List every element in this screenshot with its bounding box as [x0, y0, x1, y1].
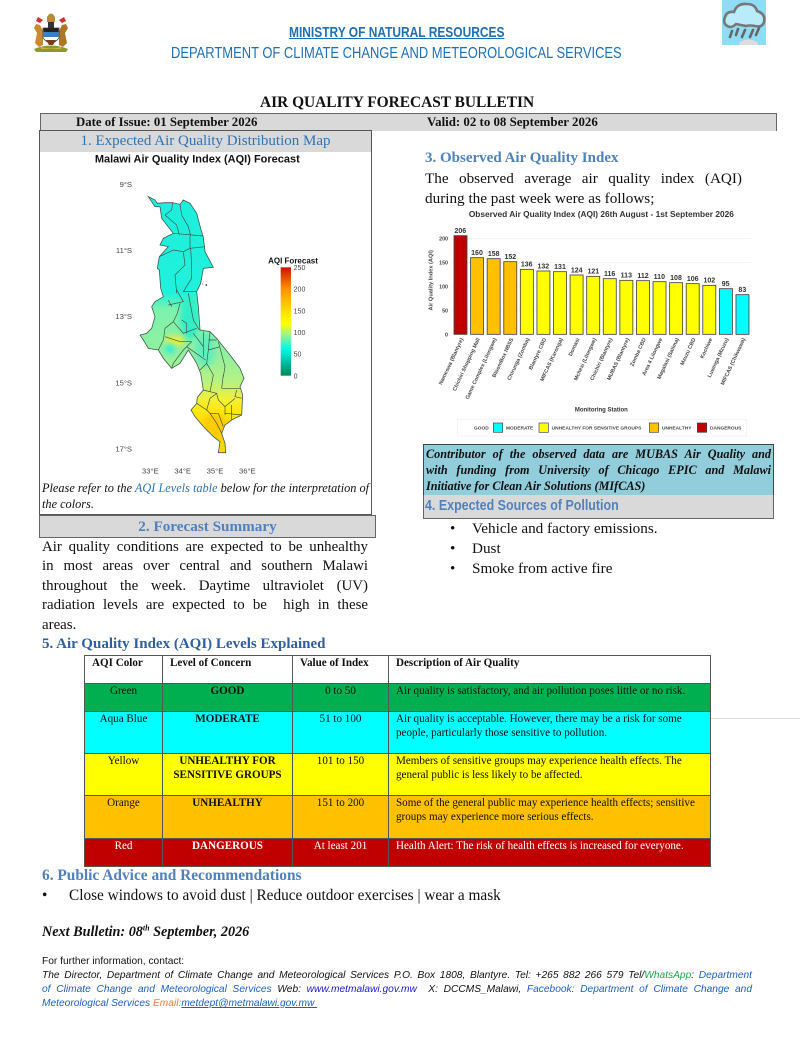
longitude labels: 33°E [142, 466, 159, 475]
contributor callout: with funding from University of Chicago EPIC and Malawi [426, 463, 771, 477]
contact information: Meteorological Services Email:metdept@metmalawi.gov.mw [42, 998, 314, 1009]
map note: the colors. [42, 497, 94, 511]
bar values: 106 [687, 276, 699, 283]
latitude labels: 9°S [120, 180, 132, 189]
station labels: Blantyre CBD [528, 337, 548, 371]
pollution sources list [450, 520, 658, 577]
colour scale [281, 267, 291, 376]
section 4 text: 4. Expected Sources of Pollution [425, 497, 619, 514]
AQI levels table: DANGEROUS [192, 840, 263, 852]
scale labels [294, 265, 305, 380]
y axis: 200 [439, 237, 448, 243]
AQI levels table: Some of the general public may experience health effects; sensitive groups may experience more serious effects. [396, 797, 695, 823]
latitude labels: 15°S [115, 378, 132, 387]
y axis: 50 [442, 309, 448, 315]
bar values: 132 [537, 263, 549, 270]
heading: section 1: 1. Expected Air Quality Distribution Map [81, 133, 330, 149]
bar values: 136 [521, 262, 533, 269]
longitude labels: 34°E [174, 466, 191, 475]
panel: map box [39, 130, 372, 515]
y axis: 150 [439, 261, 448, 267]
bar values: 95 [722, 281, 730, 288]
bar values [454, 228, 746, 294]
latitude labels: 13°S [115, 312, 132, 321]
scale labels: 50 [294, 352, 302, 359]
x axis title: Monitoring Station [575, 408, 628, 414]
AQI levels table: Aqua Blue [100, 713, 147, 725]
bar values: 131 [554, 264, 566, 271]
bar values: 113 [621, 273, 632, 280]
station labels: Chichiri (Blantyre) [590, 337, 615, 382]
legend title: AQI Forecast [268, 256, 318, 265]
contact information: The Director, Department of Climate Change and Meteorological Services P.O. Box 1808, Blantyre. Tel: +265 882 266 579 Tel/WhatsApp: Department [42, 970, 752, 981]
contributor callout: Contributor of the observed data are MUBAS Air Quality and [426, 447, 771, 461]
chart legend: GOOD [474, 425, 489, 431]
station labels: BloomBox NBSS [492, 337, 515, 379]
station labels: Domasi [568, 337, 582, 357]
map note: Please refer to the AQI Levels table below for the interpretation of [42, 481, 369, 495]
station labels [438, 337, 747, 400]
chart legend: DANGEROUS [710, 425, 742, 431]
station labels: MIFCAS (Chikwawa) [720, 337, 747, 386]
heading: section 4 [423, 495, 774, 519]
chart legend: UNHEALTHY [662, 425, 692, 431]
public advice: • [42, 887, 47, 904]
AQI levels table: Health Alert: The risk of health effects is increased for everyone. [396, 840, 684, 852]
scale labels: 100 [294, 330, 305, 337]
bar values: 110 [654, 274, 665, 281]
chart legend [457, 419, 747, 436]
AQI levels table: Air quality is acceptable. However, there may be a risk for some people, particularly those sensitive to pollution. [396, 713, 682, 739]
bar values: 116 [604, 271, 615, 278]
bar values: 160 [471, 250, 483, 257]
pollution sources list: Dust [472, 540, 501, 557]
AQI levels table: AQI Color [92, 657, 143, 669]
station labels: Kochiwe [699, 337, 714, 360]
longitude labels: 36°E [239, 466, 256, 475]
forecast summary text: Air quality conditions are expected to be unhealthy [42, 538, 368, 554]
y axis [429, 237, 448, 338]
pollution sources list: • [450, 540, 455, 557]
public advice: Close windows to avoid dust | Reduce outdoor exercises | wear a mask [69, 887, 501, 904]
forecast summary text: in most areas over central and southern Malawi [42, 558, 368, 574]
title: AIR QUALITY FORECAST BULLETIN [260, 93, 534, 111]
icon: Malawi coat of arms [34, 14, 68, 52]
forecast summary text: throughout the week. Daytime ultraviolet (UV) [42, 578, 368, 594]
station labels: Game Complex (Lilongwe) [465, 337, 499, 400]
contact information: For further information, contact: [42, 956, 184, 967]
scale labels: 0 [294, 373, 298, 380]
station labels: Chirunga (Zomba) [507, 337, 532, 381]
observed intro text: The observed average air quality index (AQI) [425, 170, 742, 187]
station labels: MIFCAS (Karonga) [539, 337, 565, 383]
chart title: Observed Air Quality Index (AQI) 26th August - 1st September 2026 [469, 209, 734, 219]
AQI levels table: 101 to 150 [317, 755, 364, 767]
contact information: of Climate Change and Meteorological Services Web: www.metmalawi.gov.mw X: DCCMS_Malawi, Facebook: Department of Climate Change and [42, 984, 752, 995]
forecast summary text: radiation levels are expected to be high in these [42, 597, 368, 613]
y axis: 100 [439, 285, 448, 291]
longitude labels [142, 466, 256, 475]
scale labels: 150 [294, 308, 305, 315]
scale labels: 200 [294, 286, 305, 293]
chart legend: UNHEALTHY FOR SENSITIVE GROUPS [552, 425, 642, 431]
AQI levels table: UNHEALTHY FOR SENSITIVE GROUPS [173, 755, 282, 781]
bar values: 121 [587, 269, 599, 276]
contact information [42, 956, 752, 1009]
pollution sources list: • [450, 520, 455, 537]
AQI levels table: Level of Concern [170, 657, 251, 669]
bar values: 124 [571, 267, 583, 274]
heading: section 3: 3. Observed Air Quality Index [425, 150, 618, 166]
forecast summary text: areas. [42, 616, 76, 632]
AQI levels table: 0 to 50 [325, 685, 356, 697]
contributor callout [423, 444, 774, 495]
bar values: 206 [454, 228, 466, 235]
chart legend: MODERATE [506, 425, 534, 431]
AQI levels table: GOOD [211, 685, 244, 697]
scale labels: 250 [294, 265, 305, 272]
date of issue: Date of Issue: 01 September 2026 [76, 115, 257, 129]
contributor callout: Initiative for Clean Air Solutions (MIfCAS) [426, 479, 645, 493]
station labels: Luwinga (Mzuzu) [707, 337, 731, 379]
map chart [95, 153, 318, 475]
pollution sources list: • [450, 560, 455, 577]
Malawi map [137, 193, 247, 457]
station labels: Area 4 Lilongwe [641, 337, 664, 377]
bars [454, 236, 749, 334]
date bar [40, 113, 777, 131]
latitude labels: 11°S [116, 246, 132, 255]
heading: section 5: 5. Air Quality Index (AQI) Levels Explained [42, 636, 326, 652]
AQI levels table: Green [110, 685, 137, 697]
AQI levels table: Value of Index [300, 657, 369, 669]
pollution sources list: Vehicle and factory emissions. [472, 520, 658, 537]
AQI levels table [84, 655, 711, 867]
heading: section 1 [40, 131, 371, 152]
bar values: 108 [670, 275, 682, 282]
heading: section 2: 2. Forecast Summary [138, 518, 277, 535]
station labels: Mchesi (Lilongwe) [573, 337, 598, 382]
observed intro text [425, 170, 742, 207]
y axis: 0 [445, 332, 448, 338]
AQI levels table: Description of Air Quality [396, 657, 519, 669]
AQI levels table: MODERATE [195, 713, 260, 725]
heading: section 6: 6. Public Advice and Recommendations [42, 867, 302, 884]
AQI levels table: Red [115, 840, 132, 852]
AQI levels table: Air quality is satisfactory, and air pollution poses little or no risk. [396, 685, 685, 697]
bar values: 152 [504, 254, 516, 261]
bar values: 83 [738, 287, 746, 294]
bar values: 102 [703, 278, 715, 285]
valid period: Valid: 02 to 08 September 2026 [427, 115, 598, 129]
AQI levels table: Members of sensitive groups may experience health effects. The general public is less likely to be affected. [396, 755, 682, 781]
icon: rain cloud [722, 0, 766, 45]
pollution sources list: Smoke from active fire [472, 560, 612, 577]
AQI levels table: Orange [107, 797, 140, 809]
station labels: Magalasi (Salima) [656, 337, 681, 380]
AQI levels table: Yellow [108, 755, 139, 767]
station labels: Nameswa (Blantyre) [438, 337, 465, 386]
longitude labels: 35°E [207, 466, 223, 475]
faint rule right of table [711, 718, 800, 719]
observed intro text: during the past week were as follows; [425, 190, 654, 207]
station labels: Zomba CBD [629, 337, 648, 367]
station labels: Mzuzu CBD [680, 337, 698, 366]
y axis: Air Quality Index (AQI) [429, 250, 435, 311]
forecast summary text [42, 538, 368, 632]
heading: department: DEPARTMENT OF CLIMATE CHANGE AND METEOROLOGICAL SERVICES [171, 45, 622, 62]
map title: Malawi Air Quality Index (AQI) Forecast [95, 153, 300, 165]
station labels: MUBAS (Blantyre) [606, 337, 631, 381]
heading: ministry: MINISTRY OF NATURAL RESOURCES [289, 24, 504, 41]
latitude labels [115, 180, 132, 453]
next bulletin: Next Bulletin: 08th September, 2026 [42, 923, 249, 940]
bar values: 112 [637, 273, 649, 280]
AQI levels table: 151 to 200 [317, 797, 364, 809]
heading: section 2 [39, 515, 376, 538]
AQI levels table: UNHEALTHY [192, 797, 263, 809]
AQI levels table: At least 201 [314, 840, 367, 852]
bar values: 158 [488, 251, 500, 258]
AQI levels table: 51 to 100 [320, 713, 361, 725]
bar chart: observed AQI [428, 209, 752, 436]
station labels: Chichiri Shopping Mall [452, 337, 482, 392]
latitude labels: 17°S [115, 444, 132, 453]
map note [42, 481, 370, 511]
